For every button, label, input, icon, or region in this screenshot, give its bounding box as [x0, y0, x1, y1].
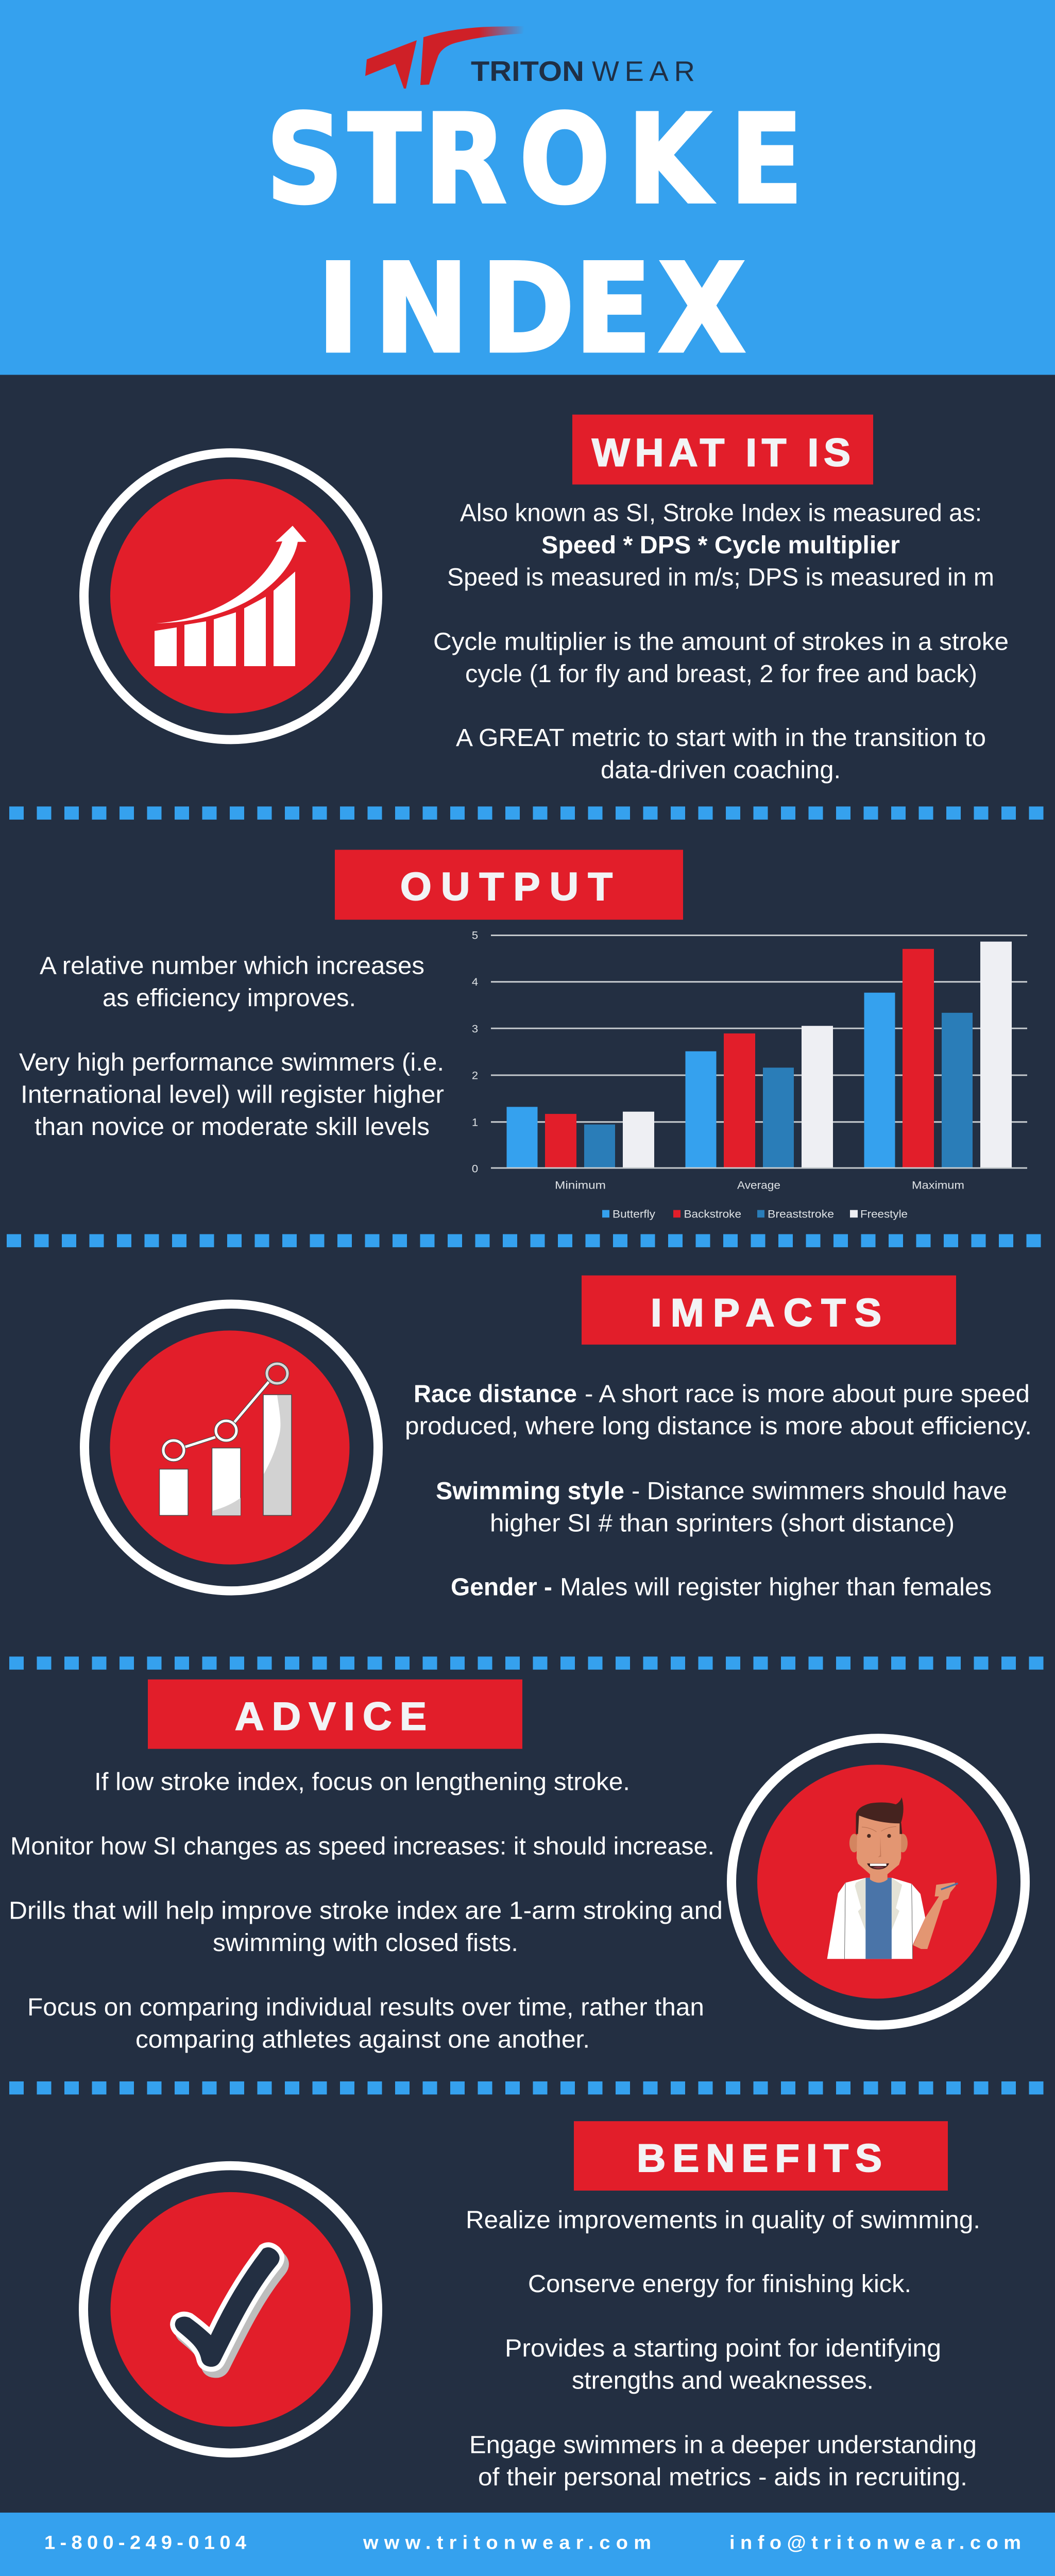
y axis labels: 1 — [472, 1116, 478, 1128]
heading: advice — [148, 1680, 522, 1749]
title: INDEX — [317, 238, 745, 381]
text: impacts: - Distance swimmers should have — [632, 1478, 1007, 1505]
text: benefits: Provides a starting point for identifying — [505, 2335, 941, 2362]
text: definition: Speed is measured in m/s; DPS is measured in m — [447, 564, 994, 591]
panel: what it is — [84, 415, 1009, 784]
legend: Butterfly — [612, 1208, 655, 1220]
text: benefits: Engage swimmers in a deeper understanding — [469, 2431, 977, 2459]
text: benefits: Realize improvements in quality of swimming. — [466, 2207, 980, 2234]
text: impacts: - A short race is more about pure speed — [585, 1380, 1030, 1408]
text: output description — [19, 952, 444, 1141]
text: advice: If low stroke index, focus on lengthening stroke. — [94, 1768, 630, 1795]
text: impacts: Race distance — [414, 1380, 577, 1408]
x axis labels: Maximum — [912, 1179, 964, 1192]
legend: Freestyle — [860, 1208, 908, 1220]
panel: impacts — [84, 1276, 1032, 1601]
legend — [602, 1208, 908, 1220]
text: output description: as efficiency improves. — [103, 985, 356, 1012]
icon: rising bars with arrow — [84, 453, 378, 740]
bars: freestyle — [623, 942, 1012, 1168]
text: benefits — [466, 2207, 980, 2491]
heading: what it is: WHAT IT IS — [592, 431, 850, 474]
footer: email: info@tritonwear.com — [729, 2532, 1021, 2553]
text: impacts: produced, where long distance is more about efficiency. — [405, 1413, 1032, 1440]
title — [266, 88, 803, 381]
text: benefits: Conserve energy for finishing kick. — [528, 2270, 911, 2298]
x axis labels — [555, 1179, 964, 1192]
text: definition: cycle (1 for fly and breast, 2 for free and back) — [465, 660, 977, 688]
text: output description: Very high performance swimmers (i.e. — [19, 1049, 444, 1076]
bar chart: stroke index by stroke — [472, 929, 1027, 1220]
text: definition: Also known as SI, Stroke Index is measured as: — [460, 499, 982, 527]
text: impacts: Swimming style — [436, 1478, 624, 1505]
x axis labels: Average — [737, 1179, 780, 1192]
text: definition: Cycle multiplier is the amount of strokes in a stroke — [433, 628, 1009, 656]
bars: backstroke — [545, 949, 934, 1168]
heading: output — [335, 850, 683, 920]
text: output description: than novice or moderate skill levels — [35, 1113, 430, 1141]
legend: Backstroke — [684, 1208, 741, 1220]
header banner — [0, 0, 1055, 381]
y axis labels: 5 — [472, 929, 478, 941]
y axis labels: 2 — [472, 1069, 478, 1082]
panel: output — [19, 850, 1027, 1220]
text: advice: Focus on comparing individual results over time, rather than — [27, 1994, 704, 2021]
footer: phone: 1-800-249-0104 — [44, 2532, 246, 2553]
text: advice: swimming with closed fists. — [213, 1929, 518, 1957]
text: advice: comparing athletes against one another. — [135, 2026, 590, 2053]
logo: Triton Wear — [365, 26, 695, 89]
icon: coach with pen — [731, 1738, 1025, 2025]
text: impacts — [405, 1380, 1032, 1601]
text: advice: Monitor how SI changes as speed increases: it should increase. — [10, 1833, 714, 1860]
text: definition: Speed * DPS * Cycle multiplier — [541, 532, 900, 559]
heading: advice: ADVICE — [235, 1694, 427, 1738]
heading: output: OUTPUT — [400, 865, 612, 909]
footer: website: www.tritonwear.com — [363, 2532, 651, 2553]
text: definition — [433, 499, 1009, 784]
icon: bars with trend line — [84, 1304, 378, 1591]
footer bar — [0, 2513, 1055, 2576]
text: output description: International level) will register higher — [21, 1081, 444, 1108]
y axis labels: 4 — [472, 975, 478, 988]
heading: impacts — [582, 1276, 956, 1345]
text: impacts: Males will register higher than females — [560, 1573, 992, 1601]
title: STROKE — [266, 88, 803, 231]
y axis labels: 0 — [472, 1162, 478, 1175]
y axis labels — [472, 929, 478, 1175]
text: definition: data-driven coaching. — [601, 756, 841, 784]
text: output description: A relative number which increases — [40, 952, 424, 979]
panel: advice — [9, 1680, 1025, 2053]
text: definition: A GREAT metric to start with in the transition to — [456, 724, 986, 752]
logo: Triton Wear: TRITON — [471, 56, 584, 87]
icon: check mark — [83, 2166, 378, 2453]
bars: breaststroke — [584, 1013, 973, 1168]
legend: Breaststroke — [768, 1208, 834, 1220]
heading: impacts: IMPACTS — [651, 1291, 881, 1335]
text: benefits: of their personal metrics - aids in recruiting. — [478, 2464, 967, 2491]
bars: butterfly — [507, 993, 895, 1168]
text: impacts: Gender - — [451, 1573, 552, 1601]
heading: benefits — [574, 2121, 948, 2191]
text: impacts: higher SI # than sprinters (short distance) — [490, 1510, 955, 1537]
heading: what it is — [572, 415, 873, 484]
heading: benefits: BENEFITS — [637, 2137, 882, 2180]
text: benefits: strengths and weaknesses. — [572, 2367, 874, 2395]
text: advice: Drills that will help improve stroke index are 1-arm stroking and — [9, 1897, 723, 1924]
text: advice — [9, 1768, 723, 2053]
logo: Triton Wear: WEAR — [592, 56, 695, 87]
panel: benefits — [83, 2121, 980, 2491]
y axis labels: 3 — [472, 1022, 478, 1035]
x axis labels: Minimum — [555, 1179, 606, 1192]
